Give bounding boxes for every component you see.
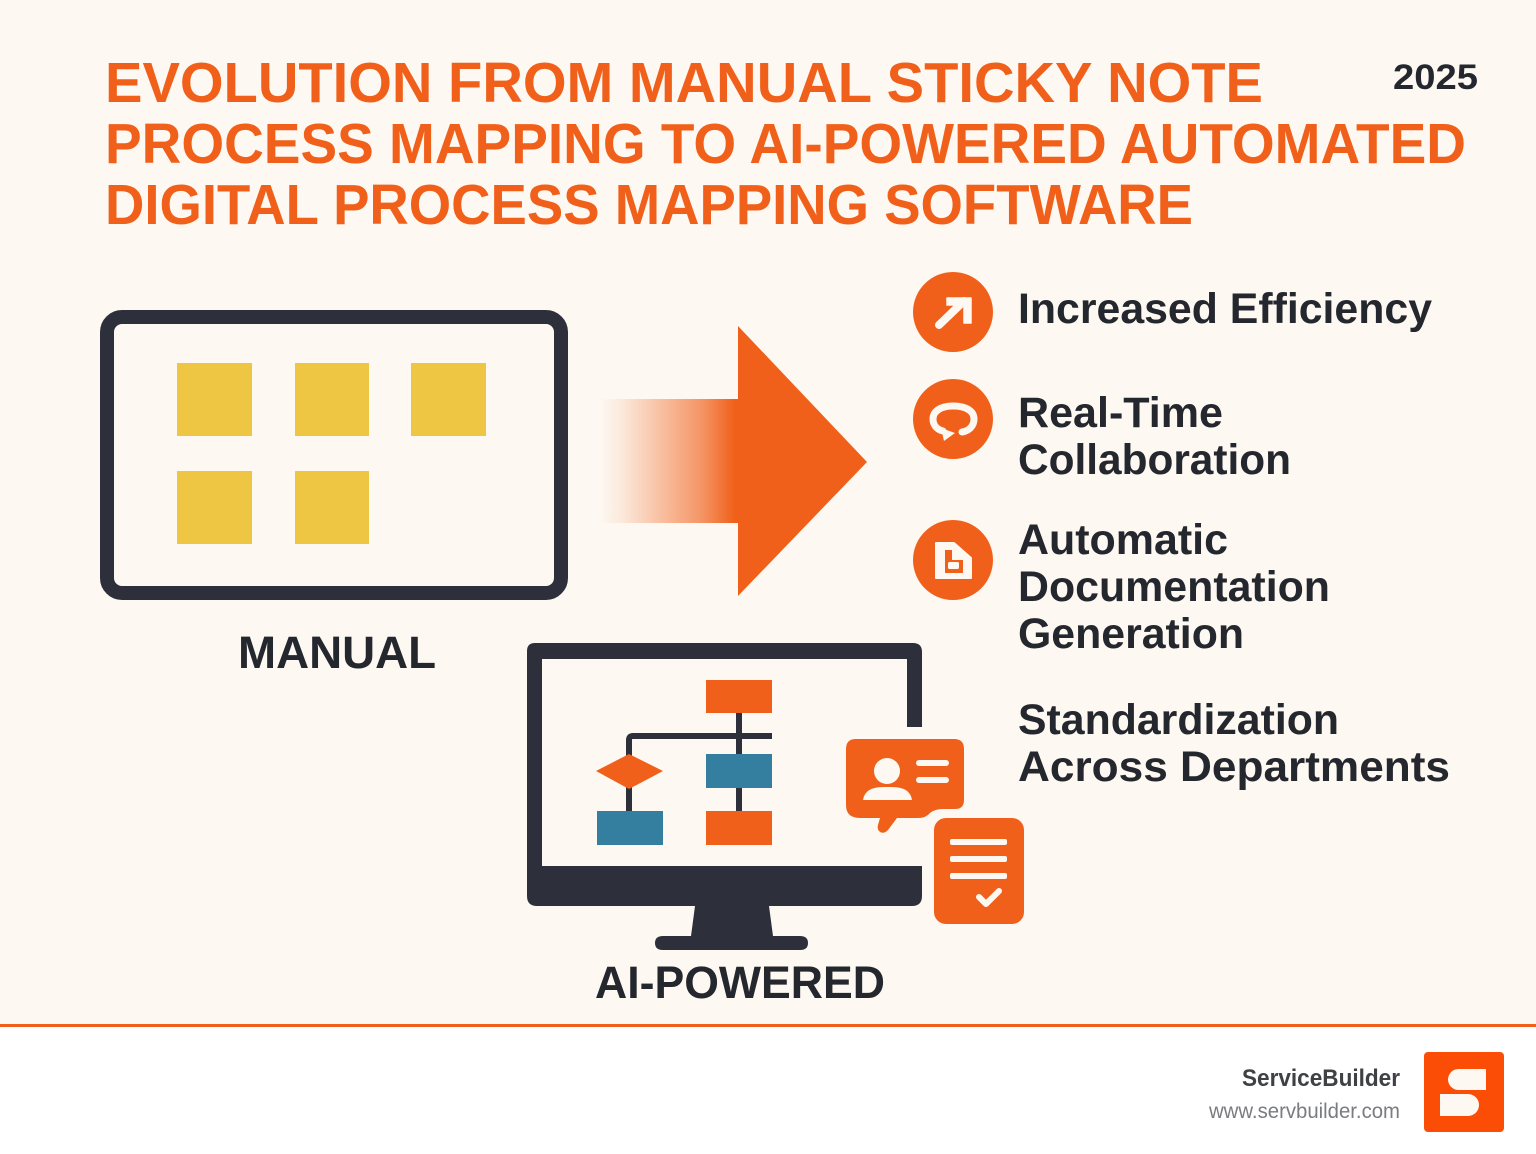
icon: efficiency arrow xyxy=(913,272,993,352)
manual label: MANUAL xyxy=(238,627,436,678)
benefit: standardization across departments: Standardization xyxy=(1018,696,1339,744)
benefit: standardization across departments xyxy=(1018,696,1450,791)
monitor frame xyxy=(527,643,922,906)
website: www.servbuilder.com xyxy=(1208,1100,1400,1123)
title: DIGITAL PROCESS MAPPING SOFTWARE xyxy=(105,173,1193,237)
icon: document xyxy=(913,520,993,600)
benefit: increased efficiency: Increased Efficiency xyxy=(1018,285,1432,333)
AI-powered monitor with flowchart xyxy=(527,643,922,950)
title xyxy=(105,51,1466,237)
benefit: automatic documentation generation xyxy=(1018,516,1330,658)
title: PROCESS MAPPING TO AI-POWERED AUTOMATED xyxy=(105,112,1466,176)
monitor stand xyxy=(655,906,808,950)
benefit: real-time collaboration: Real-Time xyxy=(1018,389,1223,437)
benefit: real-time collaboration: Collaboration xyxy=(1018,436,1291,484)
benefit: standardization across departments: Across Departments xyxy=(1018,743,1450,791)
brand name: ServiceBuilder xyxy=(1242,1065,1400,1092)
title: EVOLUTION FROM MANUAL STICKY NOTE xyxy=(105,51,1263,115)
benefit: real-time collaboration xyxy=(1018,389,1291,484)
benefit: automatic documentation generation: Generation xyxy=(1018,610,1244,658)
flowchart connectors xyxy=(629,712,772,812)
icon: checklist document xyxy=(934,818,1024,924)
benefit: automatic documentation generation: Documentation xyxy=(1018,563,1330,611)
logo xyxy=(1424,1052,1504,1132)
manual whiteboard with sticky notes xyxy=(107,317,561,593)
transition arrow xyxy=(600,326,867,596)
year label: 2025 xyxy=(1393,58,1478,97)
AI-powered label: AI-POWERED xyxy=(595,957,885,1008)
sticky notes xyxy=(177,363,486,544)
flowchart nodes xyxy=(706,680,772,713)
benefit: automatic documentation generation: Automatic xyxy=(1018,516,1228,564)
icon: profile chat bubble xyxy=(846,739,964,833)
footer xyxy=(0,1024,1536,1154)
icon: collaboration speech bubble xyxy=(913,379,993,459)
